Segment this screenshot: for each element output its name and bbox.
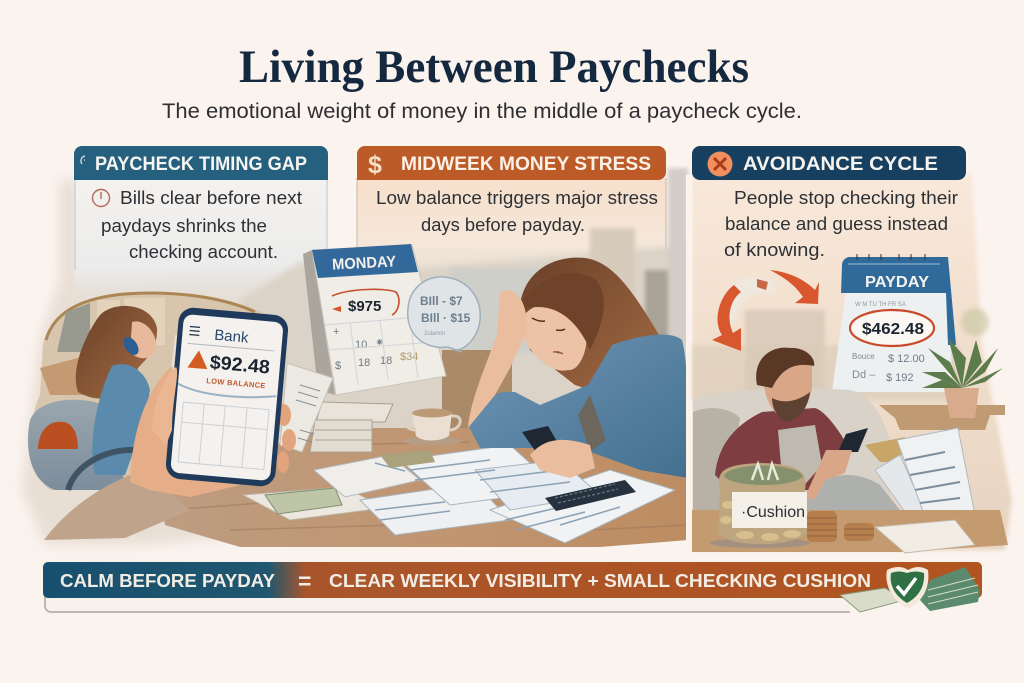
cushion	[865, 437, 905, 462]
banner shadow box	[45, 596, 850, 612]
title: Living Between Paychecks	[239, 41, 749, 93]
icon: header clock	[81, 156, 85, 164]
speech bubble: bills: BIll - $7	[420, 294, 463, 308]
cash stack	[380, 450, 435, 468]
icon: clock	[92, 190, 110, 206]
cushion jar: ·Cushion	[741, 504, 805, 521]
legs	[800, 475, 900, 510]
icon: x badge	[708, 152, 732, 176]
calendar contents: $	[335, 360, 341, 372]
cash right	[920, 567, 980, 611]
calendar contents: +	[333, 326, 339, 338]
panel card	[357, 178, 666, 273]
sofa	[693, 388, 890, 510]
calendar: payday: Bouce	[852, 352, 875, 361]
calculator	[545, 480, 636, 511]
header label: MIDWEEK MONEY STRESS	[401, 154, 651, 175]
calendar contents: 10	[355, 339, 367, 351]
phone	[838, 428, 868, 452]
arrows: cycle	[712, 270, 819, 351]
app header: Bank	[214, 327, 250, 347]
car body	[31, 293, 262, 490]
hair back	[520, 258, 662, 395]
phone in hand	[44, 307, 296, 540]
panel: paycheck timing gap	[22, 146, 330, 545]
calendar: payday: $ 192	[886, 372, 914, 384]
center bills	[243, 445, 675, 543]
speech bubble: bills	[408, 277, 480, 352]
panel text: balance and guess instead	[725, 214, 948, 234]
wood wainscot	[442, 350, 512, 435]
subtitle: The emotional weight of money in the middle of a paycheck cycle.	[162, 100, 802, 123]
calendar contents: $975	[348, 298, 381, 315]
calendar: payday: PAYDAY	[865, 274, 929, 291]
calendar: payday: W M TU TH FR SA	[855, 302, 906, 308]
note papers stack	[280, 363, 393, 452]
calendar: payday	[832, 254, 956, 392]
panel text: People stop checking their	[734, 188, 958, 208]
banner left label: CALM BEFORE PAYDAY	[60, 571, 275, 591]
table right	[692, 510, 1008, 553]
header	[692, 146, 966, 180]
torso	[715, 408, 850, 490]
raised hand	[468, 290, 527, 428]
calendar: monday	[303, 244, 446, 395]
banner bar	[43, 562, 982, 598]
potted plant	[879, 308, 1005, 430]
man on sofa	[693, 348, 905, 510]
calendar contents: 18	[380, 355, 392, 367]
equals sign: =	[298, 568, 311, 594]
thumb	[152, 367, 177, 445]
speech bubble: bills: BIll · $15	[421, 311, 471, 325]
city wash	[692, 277, 960, 410]
bottom banner	[43, 562, 982, 612]
woman on phone	[68, 306, 157, 490]
face	[522, 304, 587, 371]
panel text: paydays shrinks the	[101, 216, 267, 236]
alert	[187, 350, 209, 369]
calendar: payday: $462.48	[862, 321, 924, 338]
car with woman on phone	[28, 293, 262, 490]
panel background	[692, 175, 1012, 550]
coins	[807, 511, 874, 542]
papers right	[875, 428, 975, 517]
phone body: $92.48	[209, 352, 271, 379]
table	[160, 428, 688, 547]
panel wash	[22, 180, 330, 545]
jacket	[468, 335, 688, 478]
calendar contents: ⁕	[375, 337, 384, 349]
banner formula: CLEAR WEEKLY VISIBILITY + SMALL CHECKING CUSHION	[329, 571, 871, 591]
city background	[240, 168, 688, 470]
calendar contents: $34	[400, 351, 418, 363]
panel text: of knowing.	[724, 240, 825, 260]
panel text	[376, 188, 658, 235]
phone body	[165, 307, 289, 487]
hair front	[516, 273, 604, 350]
panel text	[724, 188, 958, 260]
calendar: payday: Dd –	[852, 369, 876, 381]
calendar: monday: MONDAY	[332, 253, 397, 274]
icon: dollar: $	[368, 151, 382, 179]
speech bubble: bills: 2ulanon	[424, 331, 445, 337]
receipt	[875, 520, 975, 553]
coffee cup	[402, 408, 462, 445]
phone body: LOW BALANCE	[206, 376, 266, 390]
calendar contents: 18	[358, 357, 370, 369]
panel text: Bills clear before next	[120, 188, 302, 208]
header label: PAYCHECK TIMING GAP	[95, 154, 307, 175]
panel: avoidance cycle	[686, 146, 1012, 550]
calendar contents	[325, 289, 435, 385]
panel text: days before payday.	[421, 215, 585, 235]
panel card	[75, 178, 327, 300]
panel text: checking account.	[129, 242, 278, 262]
header label: AVOIDANCE CYCLE	[743, 154, 938, 175]
icon: shield check	[886, 567, 928, 609]
header	[357, 146, 666, 180]
phone at ear	[120, 334, 142, 358]
panel text	[101, 188, 302, 262]
calendar: payday: $ 12.00	[888, 353, 925, 365]
cash left	[840, 588, 905, 612]
arm	[44, 470, 190, 540]
panel header	[74, 146, 328, 180]
panel: midweek money stress	[240, 146, 688, 470]
panel text: Low balance triggers major stress	[376, 188, 658, 208]
phone	[522, 426, 562, 455]
woman stressed	[468, 258, 688, 511]
cushion jar	[710, 463, 874, 548]
head	[762, 356, 812, 420]
